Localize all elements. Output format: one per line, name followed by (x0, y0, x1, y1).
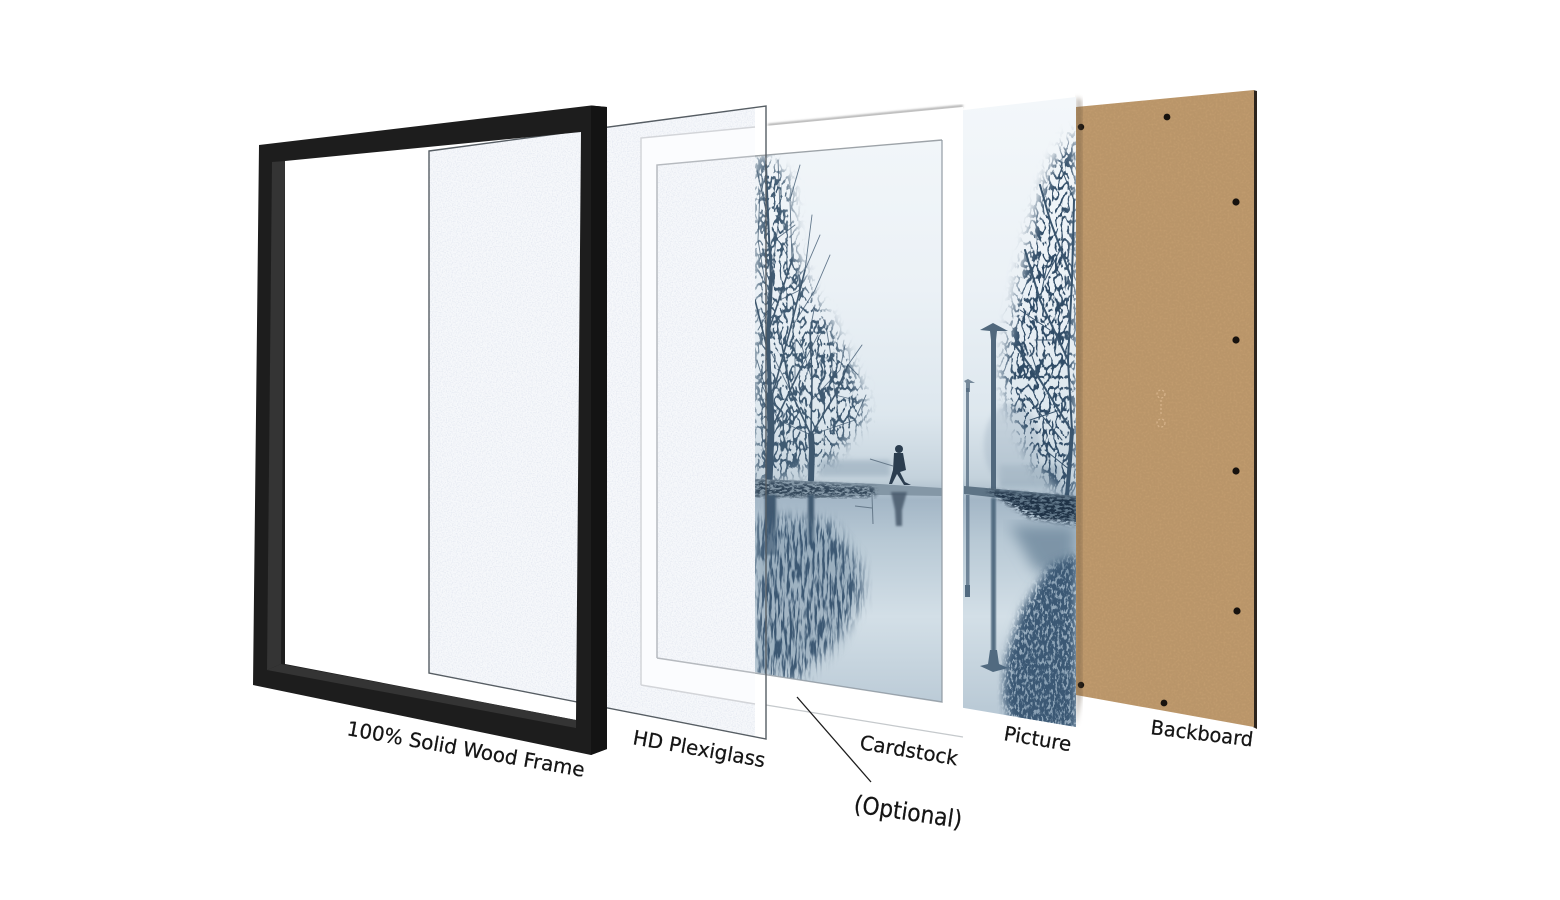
label: solid wood frame: 100% Solid Wood Frame (345, 716, 587, 782)
right water dark band (1010, 525, 1076, 578)
backboard centre stamp (1157, 390, 1165, 427)
ground strip left (755, 479, 942, 498)
mat right edge shadow (964, 108, 966, 737)
mat bottom edge (766, 705, 963, 737)
photo sky and water (750, 90, 1080, 730)
mat surface (641, 107, 963, 737)
ground texture right (985, 490, 1076, 526)
right tree crown (1002, 130, 1076, 496)
plexiglass tint (429, 108, 755, 737)
mat seen through plexiglass (641, 127, 755, 704)
panel: wood frame (253, 106, 607, 755)
frame front (253, 106, 607, 755)
leader line (797, 697, 871, 782)
lamp reflections (965, 495, 1008, 672)
tree reflection branches (755, 515, 862, 680)
person reflection (891, 492, 907, 526)
right tree branches (1015, 165, 1074, 495)
lamp posts (964, 323, 1008, 493)
tree crowns (755, 150, 866, 480)
trunk reflections (765, 495, 814, 555)
panel: backboard (1076, 90, 1257, 729)
panel: picture (750, 90, 1082, 732)
backboard surface (1076, 90, 1254, 727)
exploded frame diagram (253, 90, 1257, 831)
distant fog trees (820, 403, 1060, 487)
label: picture: Picture (1002, 721, 1073, 756)
ground texture left (755, 480, 875, 497)
panel: cardstock mat (641, 106, 965, 737)
label: optional: (Optional) (852, 790, 964, 834)
label: backboard: Backboard (1149, 715, 1255, 752)
window right edge (755, 140, 942, 702)
frame bevel left (267, 161, 285, 670)
mat top shadow (768, 106, 963, 125)
window top edge (755, 140, 942, 156)
twig in water (855, 495, 873, 524)
panel: plexiglass (429, 106, 766, 739)
label: plexiglass: HD Plexiglass (631, 725, 767, 772)
frame bevel bottom (267, 664, 576, 728)
backboard screw holes (1078, 114, 1241, 706)
tree branches (755, 160, 866, 482)
ground strip right (964, 486, 1076, 522)
right tree reflection twigs (1004, 555, 1076, 732)
walking person (870, 445, 911, 485)
frame side (591, 106, 607, 755)
right tree reflection (1006, 560, 1076, 730)
plexiglass outline (429, 106, 766, 739)
picture shadow on backboard (1076, 97, 1082, 727)
label: cardstock: Cardstock (858, 730, 960, 770)
backboard edge (1253, 90, 1257, 729)
tree reflection mass (755, 522, 862, 672)
